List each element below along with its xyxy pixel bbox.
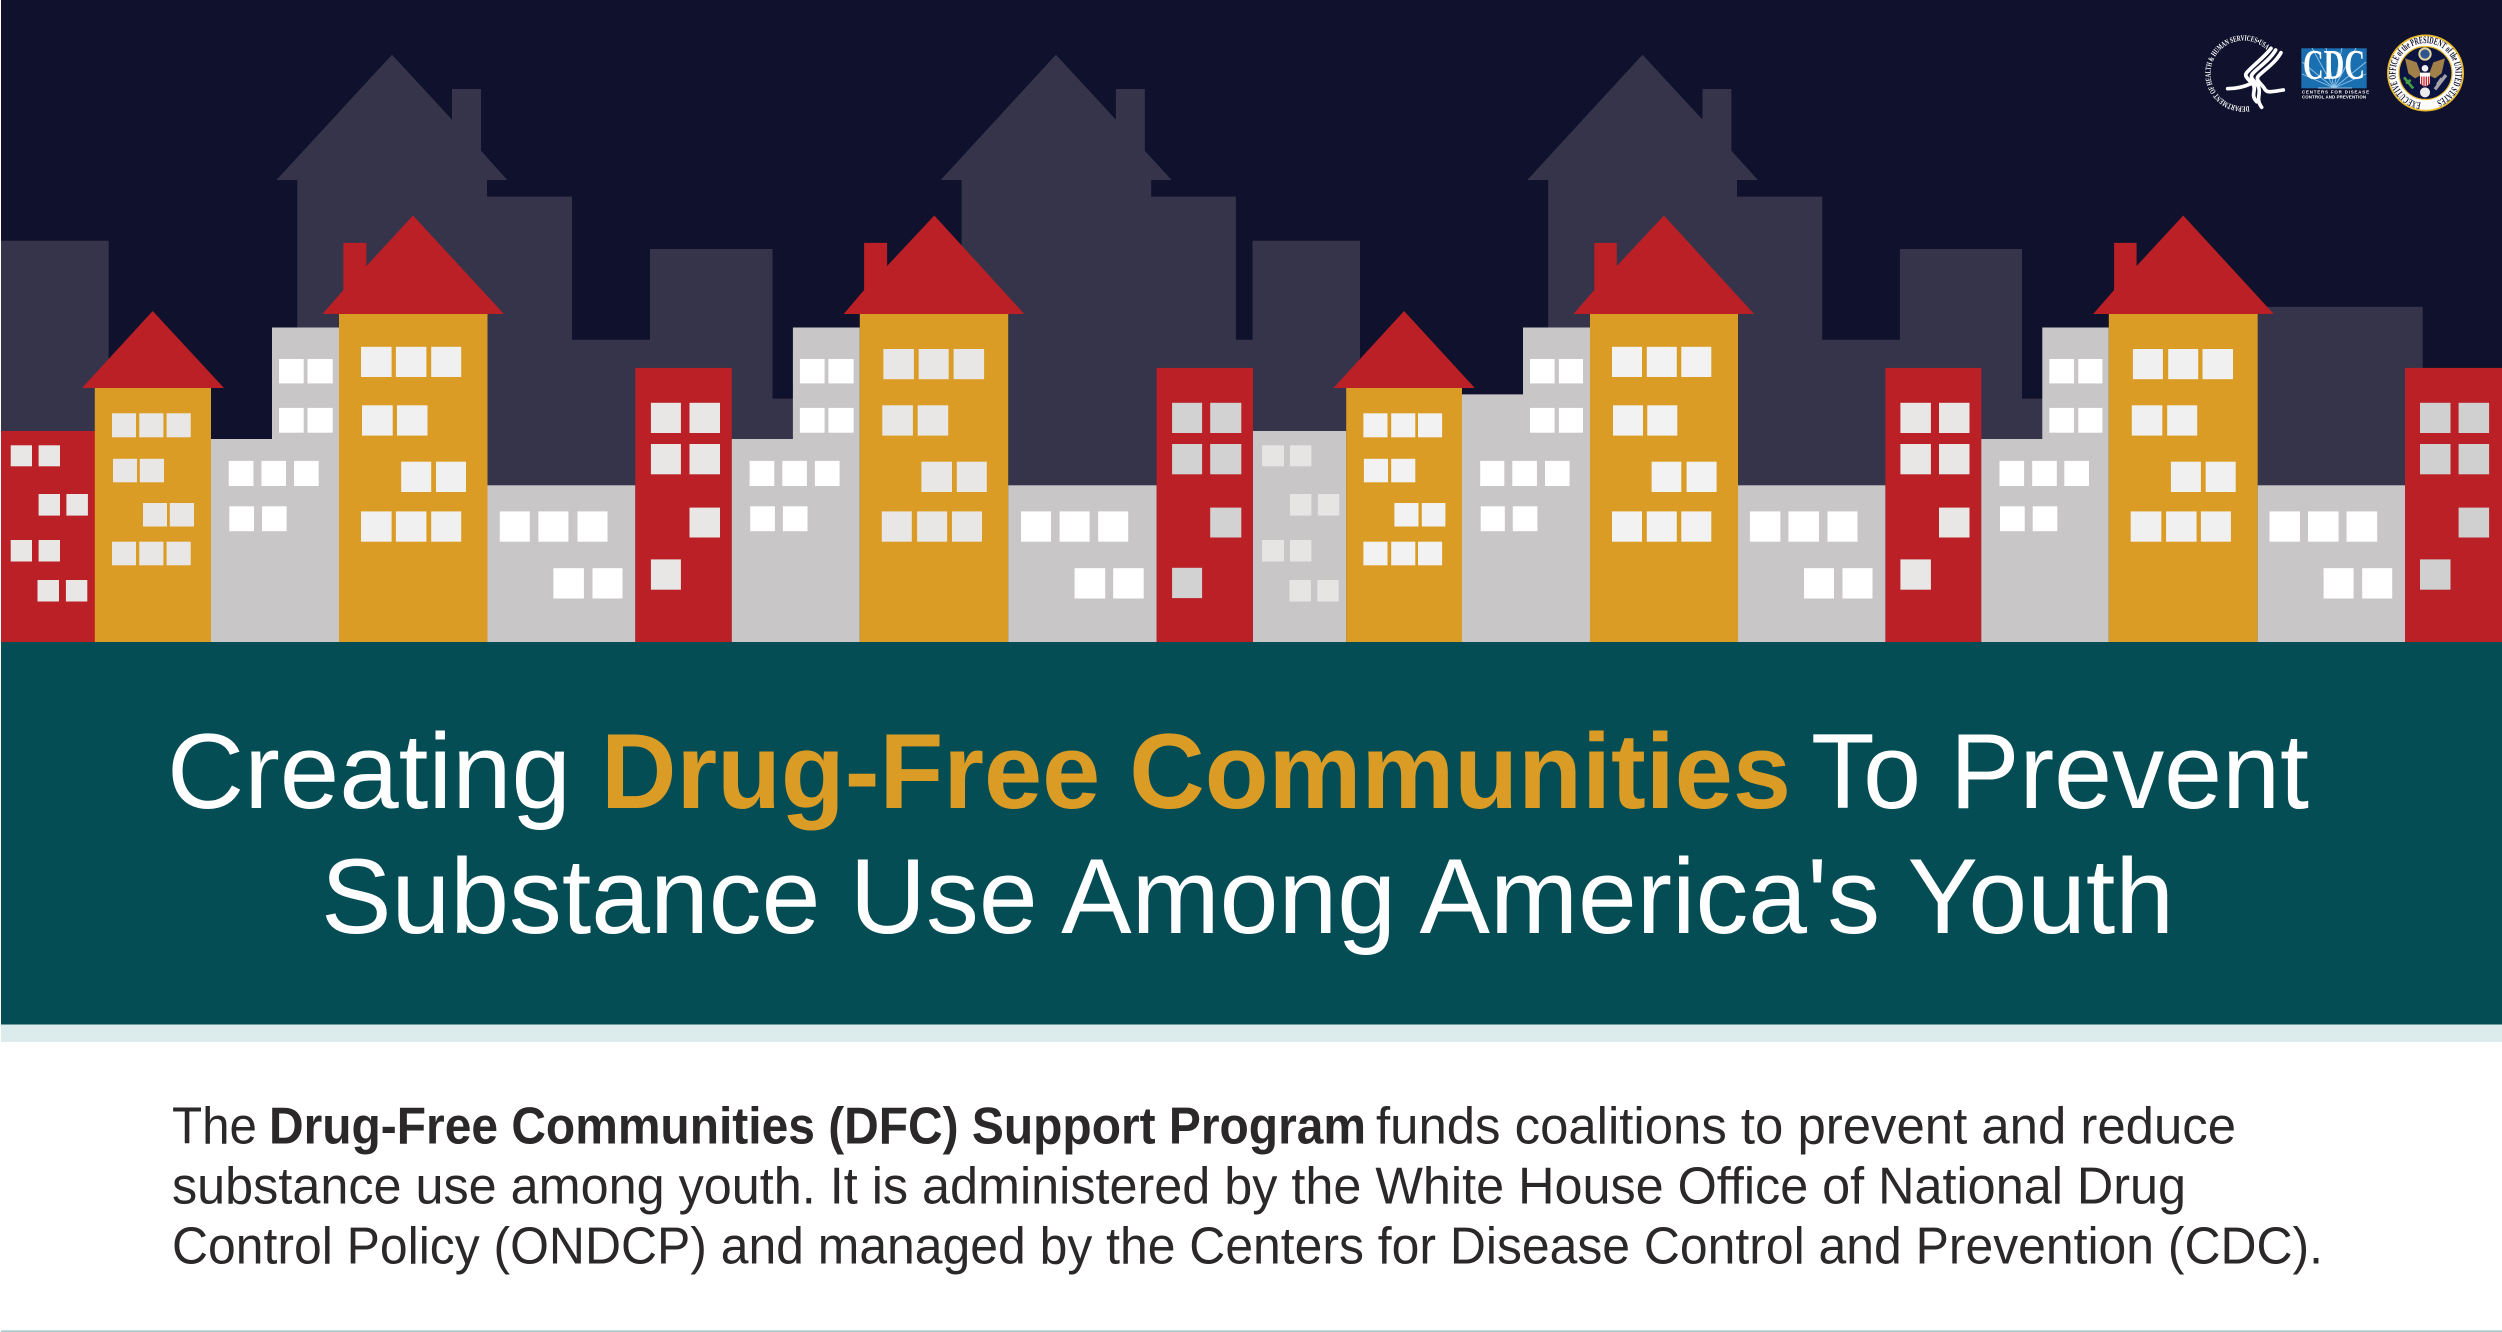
background skyline silhouettes	[0, 55, 2423, 642]
intro paragraph: The	[172, 1097, 257, 1155]
red building 5	[2405, 368, 2502, 642]
gold tower 2 with chimney roof	[322, 216, 504, 642]
red building 4	[1885, 368, 1981, 642]
grey stepped building 3	[1462, 328, 1590, 642]
red building 1	[0, 431, 95, 642]
red building 3	[1157, 368, 1253, 642]
grey low building 4	[2258, 485, 2405, 642]
title text: Substance Use Among America's Youth	[321, 836, 2174, 956]
title text: Drug-Free Communities	[601, 711, 1791, 831]
grey low building 3	[1738, 485, 1885, 642]
light accent band	[0, 1024, 2502, 1042]
logo: Executive Office of the President seal: EXECUTIVE OFFICE of the PRESIDENT of the UNITED STATES	[2388, 36, 2462, 110]
grey low building 2	[1008, 485, 1157, 642]
red building 2	[635, 368, 732, 642]
title text: To Prevent	[1811, 711, 2309, 831]
intro paragraph: Control Policy (ONDCP) and managed by the Centers for Disease Control and Prevention (CDC).	[172, 1217, 2323, 1275]
gold tower 6 with chimney roof	[2093, 216, 2274, 642]
logo: CDC	[2301, 43, 2369, 100]
logo: CDC: CENTERS FOR DISEASE	[2302, 90, 2369, 94]
title text: Creating	[167, 711, 571, 831]
gold tower 1 with roof	[82, 311, 224, 642]
night sky background	[0, 0, 2502, 642]
grey narrow building	[1253, 431, 1346, 642]
logo: HHS department seal: DEPARTMENT OF HEALTH & HUMAN SERVICES•USA	[2205, 35, 2269, 112]
intro paragraph: funds coalitions to prevent and reduce	[1376, 1097, 2236, 1155]
logo: CDC: CDC	[2303, 43, 2365, 89]
gold tower 3 with chimney roof	[844, 216, 1024, 642]
intro paragraph: Drug-Free Communities (DFC) Support Program	[269, 1097, 1366, 1155]
grey low building 1	[488, 485, 635, 642]
logo: CDC: CONTROL AND PREVENTION	[2302, 94, 2366, 100]
title banner	[0, 642, 2502, 1024]
gold tower 5 with chimney roof	[1573, 216, 1754, 642]
grey stepped building 4	[1981, 328, 2109, 642]
grey stepped building 2	[732, 328, 860, 642]
foreground buildings	[0, 216, 2502, 642]
intro paragraph	[172, 1097, 2323, 1275]
gold tower 4 with roof	[1333, 311, 1475, 642]
intro paragraph: substance use among youth. It is administered by the White House Office of National Drug	[172, 1157, 2186, 1215]
title text	[167, 711, 2309, 956]
grey stepped building 1	[211, 328, 339, 642]
